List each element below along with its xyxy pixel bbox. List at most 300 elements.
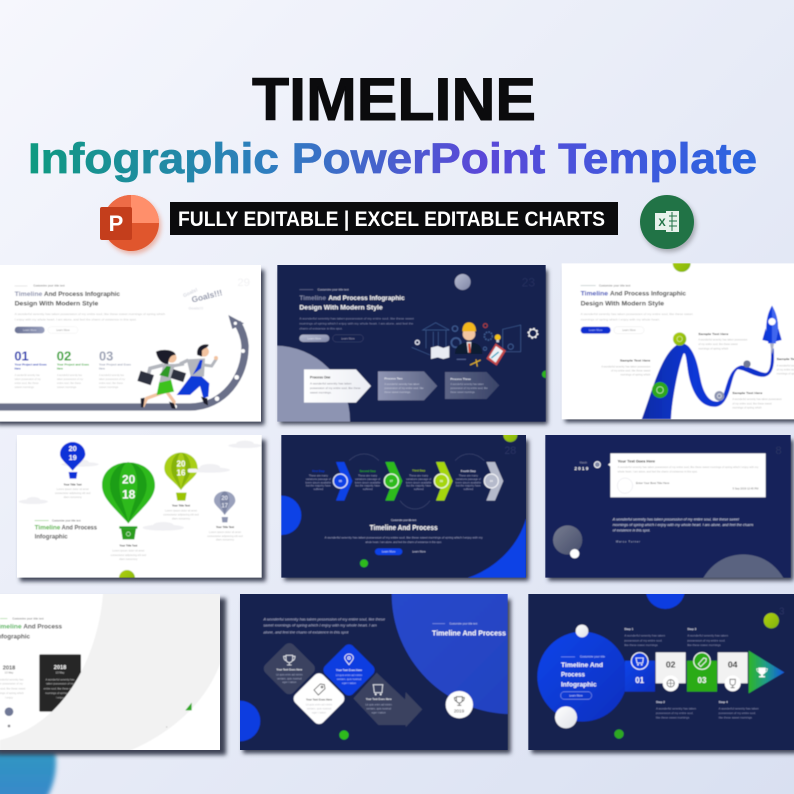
heading — [370, 518, 438, 532]
step 3 text: possession of my entire soul, — [687, 638, 726, 642]
heading: Timeline — [299, 295, 326, 302]
diamond: tag: veniam, quis nostrud — [307, 706, 332, 710]
heading: And Process — [23, 624, 62, 631]
buttons: Learn More — [56, 328, 70, 332]
panel: white 2018 cards slide — [0, 590, 226, 755]
arrow shape: cart — [353, 673, 422, 727]
step 02: 02 — [57, 350, 71, 364]
diamond: pin: veniam, quis nostrud — [337, 677, 362, 681]
card 2018 light: 13 May — [5, 670, 14, 674]
heading: Customize your title text — [318, 287, 349, 291]
decorative circles — [614, 570, 779, 739]
step labels: These are many — [409, 474, 429, 478]
step labels: but the majority have — [456, 484, 481, 488]
decorative circles — [277, 273, 546, 422]
date marker: March — [580, 460, 588, 464]
label: left: Sample Text Here — [620, 358, 651, 362]
chevron 1 — [333, 462, 352, 501]
paragraph: I enjoy with my whole heart. I am alone, and feel the charm of existence in this spot. — [15, 317, 137, 321]
diamond: trophy: eger t tation — [282, 680, 297, 684]
arrow shape: cart: Your Text Goes Here — [366, 697, 392, 701]
big blue title circle: Infographic — [561, 681, 597, 688]
blue ribbon timeline — [642, 343, 774, 419]
step labels: suffered — [314, 487, 324, 491]
chevron 3 — [434, 462, 453, 501]
step labels: lorem ipsum available — [406, 480, 432, 484]
caption 2019: Lorem ipsum dolor sit amet — [57, 487, 89, 491]
caption 2016: diam nonummy — [172, 516, 191, 520]
step 02: entire soul, like these — [57, 381, 82, 385]
step labels: Fourth Step — [461, 469, 476, 473]
step 2 text: like these sweet mornings — [656, 716, 690, 720]
step 4 text: Step 4 — [719, 700, 728, 704]
step 02 block — [656, 652, 686, 691]
date marker — [574, 460, 600, 471]
heading: Customize your title text — [599, 283, 631, 287]
step 02: Your Project and Goes — [57, 362, 90, 366]
step 03 block: 03 — [698, 676, 707, 685]
process one — [304, 369, 371, 403]
caption 2016: Lorem ipsum dolor sit amet — [165, 508, 197, 512]
label: valley: mornings of spring which — [732, 405, 762, 409]
diamond: pin — [321, 642, 377, 698]
diamond: tag: Your Text Goes Here — [306, 697, 332, 701]
buttons — [375, 548, 426, 555]
arrow road — [0, 315, 245, 409]
panel: chevron steps slide — [262, 428, 529, 581]
process two: these sweet mornings. — [384, 390, 411, 394]
buttons: Learn More — [341, 336, 355, 340]
heading: Design With Modern Style — [15, 301, 99, 308]
step labels: but the majority have — [406, 484, 432, 488]
process three — [445, 372, 499, 399]
label: peak: mornings of spring which — [698, 346, 729, 350]
caption 2019: diam nonummy — [64, 495, 82, 499]
step 2 text: possession of my entire soul, — [656, 711, 694, 715]
step 2 text — [656, 700, 697, 720]
milestones — [652, 332, 751, 401]
buttons — [299, 335, 363, 342]
arrow shape: cart: veniam, quis nostrud — [366, 706, 391, 710]
slide number: 8 — [775, 445, 782, 457]
caption 2017: diam nonummy — [216, 538, 235, 542]
step 04 block — [718, 652, 748, 691]
label: peak: Sample Text Here — [698, 332, 729, 336]
step labels: lorem ipsum available — [355, 480, 381, 484]
step labels: These are many — [309, 474, 329, 478]
step 4 text: possession of my entire soul, — [719, 711, 756, 715]
card 2018 dark: 13 May — [56, 670, 65, 674]
step labels: variations passage of — [456, 477, 481, 481]
quote: sweet mornings of spring which I enjoy with my whole heart. I am — [263, 624, 377, 628]
card 2018 dark — [39, 654, 81, 712]
quote: A wonderful serenity has taken possession of my entire soul, like these sweet — [612, 517, 740, 521]
step 02: A wonderful serenity has — [57, 373, 83, 377]
balloon 2016: 16 — [177, 469, 186, 478]
process two: possession of my entire soul, like — [384, 386, 424, 390]
quote: alone, and feel the charm of existence in this spot — [263, 630, 349, 634]
banner: fully editable — [170, 202, 618, 235]
goals lettering: Goals! — [182, 287, 199, 299]
light grey curved band — [0, 590, 223, 753]
badge 2019 — [446, 691, 473, 718]
step 2 text: Step 2 — [656, 700, 665, 704]
diamond: trophy: veniam, quis nostrud — [277, 676, 302, 680]
panel: four steps arrow slide — [525, 570, 794, 753]
step 3 text: Step 3 — [687, 627, 697, 631]
chevron 2 — [384, 462, 402, 501]
heading: Timeline — [35, 526, 61, 532]
caption 2017 — [207, 525, 243, 542]
decorative circles — [553, 525, 789, 646]
step labels: Second Step — [360, 469, 376, 473]
process three: these sweet mornings. — [450, 390, 476, 394]
badge 2019: 2019 — [454, 708, 465, 713]
step 3 text — [687, 627, 729, 647]
decorative shapes — [262, 428, 526, 581]
bottom dot — [165, 726, 168, 727]
diamond: tag: Lit quis enim ad minim — [306, 702, 333, 706]
process one: sweet mornings. — [310, 391, 332, 395]
step 01: 01 — [14, 350, 29, 364]
panel: rocket ribbon slide — [558, 254, 794, 423]
woman running — [137, 350, 186, 409]
diamond: trophy — [261, 641, 317, 697]
step 1 text: possession of my entire soul, — [624, 638, 663, 642]
lime half circle — [672, 263, 692, 273]
large blue circle — [392, 474, 632, 714]
label: left: mornings of spring which — [620, 373, 651, 377]
heading — [299, 287, 405, 312]
man running — [177, 344, 218, 406]
caption 2017: consectetur adipiscing elit sed — [207, 534, 243, 538]
diamond: tag: eger t tation — [312, 710, 327, 714]
card 2018 dark: A wonderful serenity has — [46, 677, 75, 681]
arrow shape: cart: Lit quis enim ad minim — [365, 702, 393, 706]
panel: goals runners slide — [0, 262, 264, 425]
step labels: These are many — [358, 474, 378, 478]
heading: Design With Modern Style — [581, 300, 664, 307]
buttons: Learn More — [412, 550, 426, 554]
step 03: sweet mornings — [99, 385, 119, 389]
step 03 — [99, 350, 132, 389]
label: valley: A wonderful serenity has taken possession — [732, 397, 782, 401]
caption 2019: Your Title Text — [64, 483, 82, 487]
left blue circle — [220, 701, 260, 741]
caption 2016 — [163, 504, 199, 520]
caption 2018: diam nonummy — [119, 557, 138, 561]
chevron 4 — [484, 462, 503, 501]
buttons: Learn More — [382, 550, 396, 554]
buttons — [15, 327, 78, 333]
heading: Customize your title text — [12, 616, 44, 620]
big blue title circle: Timeline And — [561, 662, 603, 669]
step 2 text: A wonderful serenity has taken — [656, 706, 697, 710]
heading: Customize your title text — [52, 518, 81, 522]
heading: Infographic — [35, 534, 68, 540]
step 01 — [14, 350, 47, 389]
big blue title circle: Learn More — [569, 694, 583, 698]
step labels: variations passage of — [306, 477, 331, 481]
heading: Customize your title text — [449, 621, 478, 625]
paragraph: mornings of spring which I enjoy with my whole heart. I am alone, and feel the — [299, 321, 414, 325]
caption 2017: Your Title Text — [216, 525, 234, 529]
balloon 2017 — [214, 491, 235, 522]
paragraph — [299, 317, 414, 330]
buttons: Learn More — [23, 328, 37, 332]
paragraph: A wonderful serenity has taken possession of my entire soul, like these sweet — [581, 312, 693, 316]
step labels: First Step — [312, 469, 325, 473]
step 04 block: 04 — [728, 659, 738, 669]
author: Marco Turner — [616, 539, 640, 543]
green corner marker — [185, 703, 192, 710]
balloon 2018: 18 — [122, 488, 136, 502]
heading — [15, 283, 120, 308]
heading: And Process — [62, 526, 98, 532]
buttons: Learn More — [308, 336, 322, 340]
caption 2016: Your Title Text — [172, 504, 190, 508]
green dot — [339, 730, 349, 740]
caption 2018: consectetur adipiscing elit sed — [111, 553, 147, 557]
big blue title circle: Process — [561, 672, 585, 679]
step 02 — [57, 350, 90, 389]
paragraph — [325, 536, 483, 544]
paragraph: A wonderful serenity has taken possession of my entire soul, like these sweet mornings of spring which — [15, 312, 166, 316]
slide number: 29 — [237, 277, 250, 289]
date marker: 2019 — [574, 466, 589, 471]
icon: Excel logo: X — [658, 217, 666, 229]
step 01: Here — [15, 367, 21, 371]
card 2018 light — [0, 665, 26, 727]
title: TIMELINE: TIMELINE — [252, 66, 536, 133]
paragraph: A wonderful serenity has taken possession of my entire soul, like these sweet — [299, 317, 414, 321]
heading — [581, 283, 686, 307]
banner: fully editable: FULLY EDITABLE | EXCEL EDITABLE CHARTS — [178, 208, 605, 231]
step 01: sweet mornings — [15, 385, 35, 389]
heading: Timeline — [581, 291, 608, 298]
label: peak: of my entire soul, like these sweet — [698, 342, 738, 346]
step 3 text: A wonderful serenity has taken — [687, 634, 729, 638]
arrow shape: cart: eger t tation — [372, 710, 386, 714]
icon: white gear — [528, 328, 538, 338]
step 02: sweet mornings — [57, 385, 77, 389]
label: valley: of my entire soul, like these sweet — [732, 401, 772, 405]
card 2018 light: 2018 — [3, 665, 15, 671]
buttons: Learn More — [589, 328, 603, 332]
goals lettering: Goals!!! — [190, 287, 223, 305]
paragraph: charm of existence in this spot. — [299, 326, 343, 330]
balloon 2018 — [102, 462, 155, 539]
quote: A wonderful serenity has taken possession of my entire soul, like these — [262, 618, 385, 622]
balloon 2019 — [60, 442, 85, 479]
step labels: variations passage of — [355, 477, 380, 481]
process three: Process Three — [450, 377, 471, 381]
step 02: Here — [57, 367, 63, 371]
card 2018 dark: entire soul, like these sweet — [44, 686, 77, 690]
diamond: pin: Your Text Goes Here — [336, 668, 362, 672]
step labels — [305, 468, 482, 491]
diamond: trophy: Lit quis enim ad minim — [276, 672, 303, 676]
step 01: A wonderful serenity has — [15, 373, 40, 377]
caption 2017: Lorem ipsum dolor sit amet — [209, 530, 241, 534]
heading: Design With Modern Style — [299, 305, 383, 312]
step 01: taken possession of my — [15, 377, 41, 381]
label: peak — [698, 332, 748, 350]
balloon 2018: 20 — [122, 472, 136, 486]
step labels: lorem ipsum available — [305, 480, 332, 484]
card: whole heart. I am alone, and feel the charm of existence in this spot. — [618, 469, 698, 473]
caption 2016: consectetur adipiscing elit sed — [163, 512, 199, 516]
decorative blue blob bottom left — [0, 700, 56, 794]
diamond: pin: eger t tation — [342, 681, 357, 685]
big blue title circle — [537, 625, 627, 728]
big blue title circle: Customize your title — [580, 655, 606, 659]
label: peak: A wonderful serenity has taken possession — [698, 338, 748, 342]
subtitle: Infographic PowerPoint Template — [28, 135, 757, 183]
chevron 1: 05 — [339, 479, 342, 483]
step 01 block: 01 — [635, 676, 645, 685]
heading — [35, 518, 98, 540]
slide number: 28 — [504, 445, 516, 457]
card: 5 Sep 2019 12:45 PM — [733, 487, 758, 491]
heading — [432, 621, 506, 637]
process two: A wonderful serenity has taken — [384, 382, 420, 386]
step labels: variations passage of — [406, 477, 431, 481]
process three: possession of my entire soul, like — [450, 386, 488, 390]
card 2018 dark: mornings of spring which — [45, 691, 75, 695]
process two: Process Two — [384, 377, 403, 381]
step 03: Your Project and Goes — [99, 362, 132, 366]
balloon 2019: 20 — [69, 444, 77, 453]
step labels: lorem ipsum available — [455, 480, 482, 484]
slide number: 23 — [522, 276, 535, 290]
label: valley — [732, 391, 782, 409]
step 03: A wonderful serenity has — [99, 373, 125, 377]
panel: process slide, navy — [276, 265, 551, 428]
paragraph: whole heart. I am alone, and feel the charm of existence in this spot. — [365, 540, 442, 544]
step labels: Third Step — [412, 468, 426, 472]
chevron 3: 09 — [440, 479, 443, 483]
heading: Timeline — [15, 291, 43, 298]
step 02: taken possession of my — [57, 377, 84, 381]
lime half circle — [119, 570, 135, 586]
process one: possession of my entire soul, like these — [310, 386, 361, 390]
label: right — [777, 357, 794, 375]
goals lettering — [183, 288, 222, 310]
paragraph — [14, 313, 165, 321]
panel: testimonial slide — [542, 432, 794, 646]
paragraph: A wonderful serenity has taken possession of my entire soul, like these sweet mornings of spring which I enjoy with my — [325, 536, 483, 540]
connector arcs — [349, 454, 484, 509]
process three: A wonderful serenity has taken — [450, 382, 484, 386]
heading: Customize your title text — [33, 283, 65, 287]
quote: mornings of spring which I enjoy with my whole heart. I am alone, and feel the charm — [613, 523, 754, 527]
caption 2018: Lorem ipsum dolor sit amet — [112, 549, 145, 553]
diamond: tag — [291, 671, 347, 727]
step labels: These are many — [459, 474, 479, 478]
clouds — [19, 441, 262, 531]
step 1 text — [624, 627, 666, 647]
card 2018 dark: taken possession of my — [46, 682, 75, 686]
arrow head with trophy — [749, 651, 784, 693]
quote — [612, 517, 754, 533]
caption 2018 — [111, 544, 147, 561]
paragraph: mornings of spring which I enjoy with my whole heart. — [581, 317, 660, 321]
panel: diamonds slide — [220, 474, 632, 753]
step 01 block — [625, 653, 655, 692]
quote — [262, 618, 385, 634]
process one: A wonderful serenity has taken — [310, 381, 352, 385]
label: valley: Sample Text Here — [732, 391, 763, 395]
step 4 text: like these sweet mornings — [719, 716, 753, 720]
process two — [378, 371, 437, 400]
label: left: A wonderful serenity has taken possession — [601, 364, 651, 368]
icon: PowerPoint logo: P — [109, 211, 123, 236]
step 4 text — [719, 700, 759, 720]
step 03: 03 — [99, 350, 113, 364]
step labels: but the majority have — [355, 484, 381, 488]
step 1 text: A wonderful serenity has taken — [624, 634, 666, 638]
quote: of existence in this spot. — [613, 529, 650, 533]
illustration: building and engineer — [412, 322, 521, 367]
step 03: Here — [99, 367, 105, 371]
heading: And Process Infographic — [610, 291, 686, 298]
balloon 2016 — [164, 453, 198, 501]
goals lettering: Goals!!! — [188, 306, 203, 311]
icon: rocket — [762, 306, 782, 355]
buttons: Learn More — [622, 328, 636, 332]
balloon 2016: 20 — [177, 459, 186, 468]
icon: Excel logo — [640, 195, 696, 252]
card 2018 dark: 2018 — [54, 665, 66, 671]
card 2018 dark: I enjoy — [56, 696, 65, 700]
step 01: entire soul, like these — [15, 381, 39, 385]
heading: Customize your title text — [391, 518, 417, 522]
panel: balloons slide — [14, 432, 266, 586]
paragraph — [580, 313, 693, 321]
step 02 block: 02 — [666, 659, 676, 669]
balloon 2017: 17 — [221, 503, 229, 509]
card — [608, 453, 766, 497]
card: Enter Your Best Title Here — [636, 481, 670, 485]
step 01: Your Project and Goes — [15, 362, 47, 366]
step 3 text: like these sweet mornings — [687, 643, 721, 647]
step 03: entire soul, like these — [99, 381, 124, 385]
step 03: taken possession of my — [99, 377, 126, 381]
heading: Timeline And Process — [370, 525, 438, 532]
heading — [0, 616, 62, 640]
card: A wonderful serenity has taken possession of my entire soul, like these sweet mornings of spring which I enjoy with my — [618, 465, 759, 469]
heading: And Process Infographic — [328, 295, 405, 302]
diamond: trophy: Your Text Goes Here — [276, 668, 303, 672]
heading: Timeline And Process — [432, 630, 506, 637]
balloon 2017: 20 — [221, 496, 229, 502]
step labels: but the majority have — [306, 484, 331, 488]
caption 2018: Your Title Text — [119, 544, 137, 548]
step labels: suffered — [464, 487, 474, 491]
step labels: suffered — [414, 487, 424, 491]
caption 2019: consectetur adipiscing elit sed — [55, 491, 91, 495]
step labels: suffered — [363, 487, 373, 491]
label: left — [601, 358, 651, 377]
step 4 text: A wonderful serenity has taken — [719, 706, 759, 710]
step 1 text: Step 1 — [624, 627, 634, 631]
balloon 2019: 19 — [69, 453, 77, 462]
icon: PowerPoint logo — [100, 195, 161, 254]
card 2018 light: I enjoy — [5, 696, 14, 700]
caption 2019 — [55, 483, 91, 499]
diamond: pin: Lit quis enim ad minim — [336, 673, 363, 677]
